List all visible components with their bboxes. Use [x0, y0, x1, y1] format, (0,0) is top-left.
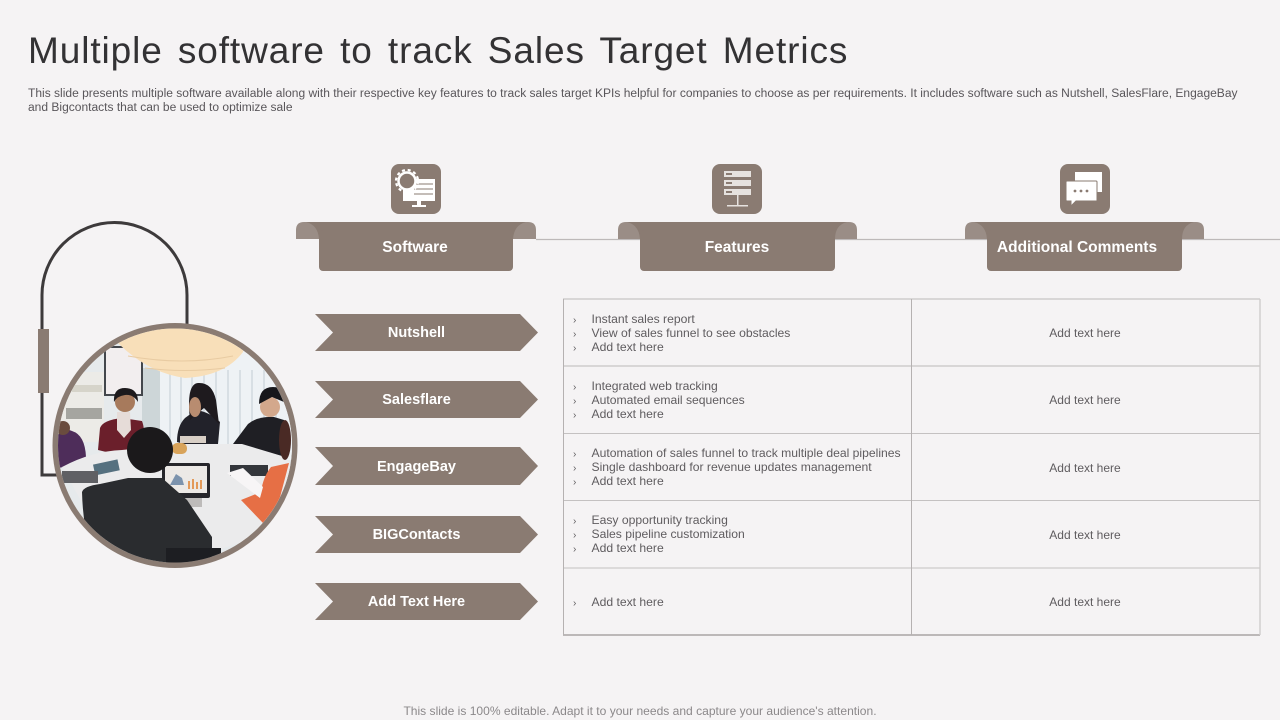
- subtitle description: [28, 86, 1238, 114]
- row 3 features: ›: [573, 463, 576, 474]
- subtitle description: This slide presents multiple software available along with their respective key features to track sales target KPIs helpful for companies to choose as per requirements. It includes software such as Nutshell, SalesFlare, EngageBay: [28, 86, 1238, 100]
- orange person: [241, 463, 289, 523]
- row 3 features: Add text here: [592, 474, 664, 488]
- circular meeting photo: [52, 320, 298, 568]
- window and shelves: [105, 347, 142, 395]
- software arrow: Add Text Here: [315, 583, 538, 620]
- row 2 features: Add text here: [592, 407, 664, 421]
- row 1 features: Add text here: [592, 340, 664, 354]
- icon: speech bubbles: [1060, 164, 1110, 214]
- curtains: [160, 340, 295, 460]
- row 4 features: ›: [573, 530, 576, 541]
- row 4 features: Add text here: [592, 541, 664, 555]
- row 2 features: ›: [573, 410, 576, 421]
- row 3 features: ›: [573, 477, 576, 488]
- icon: software settings monitor: [391, 164, 441, 214]
- row 1 features: [573, 312, 790, 354]
- header connector line: [536, 238, 1280, 240]
- row 5 features: Add text here: [592, 595, 664, 609]
- row 2 features: [573, 379, 745, 421]
- row 1 features: View of sales funnel to see obstacles: [592, 326, 790, 340]
- additional comments column: Add text here: [1049, 528, 1121, 542]
- header ribbon: Features: [618, 222, 857, 271]
- header ribbon: Additional Comments: [965, 222, 1204, 271]
- arch cable decoration: [38, 222, 187, 475]
- software arrow: Salesflare: Salesflare: [382, 392, 451, 408]
- row 3 features: [573, 446, 901, 488]
- row 1 features: ›: [573, 315, 576, 326]
- row 4 features: ›: [573, 544, 576, 555]
- software arrow: EngageBay: [315, 447, 538, 485]
- icon: server rack: [712, 164, 762, 214]
- additional comments column: Add text here: [1049, 393, 1121, 407]
- row 3 features: ›: [573, 449, 576, 460]
- subtitle description: and Bigcontacts that can be used to optimize sale: [28, 100, 293, 114]
- row 2 features: ›: [573, 396, 576, 407]
- laptop: [162, 463, 210, 498]
- software arrow: BIGContacts: BIGContacts: [373, 527, 460, 543]
- header ribbon: Software: Software: [382, 239, 448, 256]
- row 1 features: Instant sales report: [592, 312, 695, 326]
- software arrow: Add Text Here: Add Text Here: [368, 594, 465, 610]
- software arrow: Nutshell: [315, 314, 538, 351]
- lamp: [118, 328, 244, 378]
- row 2 features: Integrated web tracking: [592, 379, 718, 393]
- header ribbon: Features: Features: [705, 239, 769, 256]
- row 1 features: ›: [573, 329, 576, 340]
- header ribbon: Software: [296, 222, 536, 271]
- additional comments column: Add text here: [1049, 595, 1121, 609]
- table: [62, 444, 294, 552]
- software arrow: Nutshell: Nutshell: [388, 325, 445, 341]
- row 2 features: Automated email sequences: [592, 393, 745, 407]
- row 4 features: Sales pipeline customization: [592, 527, 745, 541]
- row 1 features: ›: [573, 343, 576, 354]
- features table: [563, 299, 1260, 635]
- row 3 features: Automation of sales funnel to track multiple deal pipelines: [592, 446, 901, 460]
- header ribbon: Additional Comments: Additional Comments: [997, 239, 1157, 256]
- row 5 features: ›: [573, 598, 576, 609]
- row 4 features: [573, 513, 745, 555]
- software arrow: EngageBay: EngageBay: [377, 459, 456, 475]
- software arrow: BIGContacts: [315, 516, 538, 553]
- row 2 features: ›: [573, 382, 576, 393]
- people back row: [98, 418, 144, 452]
- footer note: This slide is 100% editable. Adapt it to your needs and capture your audience's attention.: [403, 704, 877, 718]
- foreground person: [82, 478, 212, 567]
- diagram: [38, 164, 1280, 636]
- row 4 features: ›: [573, 516, 576, 527]
- row 4 features: Easy opportunity tracking: [592, 513, 728, 527]
- additional comments column: Add text here: [1049, 461, 1121, 475]
- additional comments column: [1049, 326, 1121, 609]
- row 3 features: Single dashboard for revenue updates management: [592, 460, 872, 474]
- software arrow: Salesflare: [315, 381, 538, 418]
- additional comments column: Add text here: [1049, 326, 1121, 340]
- title: Multiple software to track Sales Target Metrics: [28, 30, 848, 71]
